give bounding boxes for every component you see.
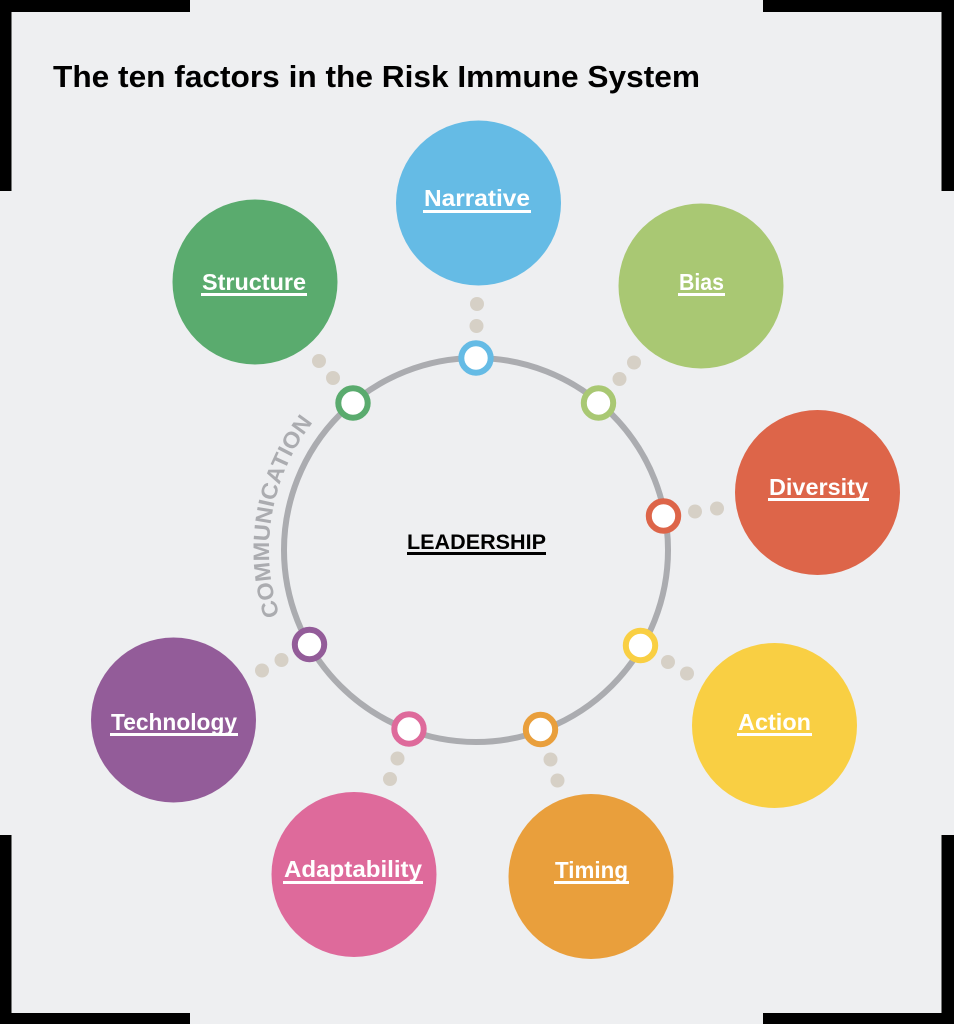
action connector dots <box>661 655 694 680</box>
factor: adaptability <box>272 714 436 957</box>
bias node <box>584 388 613 418</box>
timing connector dots <box>544 752 564 788</box>
timing label: Timing <box>555 857 628 883</box>
action label: Action <box>738 709 811 735</box>
factor: narrative <box>396 120 561 373</box>
narrative node <box>461 343 491 373</box>
bias connector dots <box>612 356 641 386</box>
narrative connector dots <box>470 297 484 333</box>
structure node <box>338 388 368 418</box>
adaptability connector dots <box>383 752 404 786</box>
structure label: Structure <box>202 269 306 295</box>
diversity node <box>649 501 678 531</box>
factor: diversity <box>649 410 900 575</box>
diversity label: Diversity <box>769 474 868 500</box>
curved label: communication: COMMUNICATION <box>254 414 312 617</box>
bias label: Bias <box>679 269 724 295</box>
narrative label: Narrative <box>424 185 530 211</box>
action node <box>626 631 655 660</box>
central ring <box>284 358 668 742</box>
narrative bubble <box>396 120 561 286</box>
adaptability label: Adaptability <box>284 856 422 882</box>
center label: leadership: LEADERSHIP <box>407 531 546 554</box>
action bubble <box>692 643 857 808</box>
adaptability bubble <box>272 792 436 957</box>
timing bubble <box>508 794 674 959</box>
diversity connector dots <box>688 502 724 518</box>
bias bubble <box>618 204 784 368</box>
technology bubble <box>91 638 256 802</box>
technology connector dots <box>255 653 288 678</box>
title: The ten factors in the Risk Immune System <box>53 59 700 94</box>
diversity bubble <box>735 410 900 575</box>
timing node <box>526 715 555 744</box>
adaptability node <box>394 714 424 744</box>
technology node <box>295 630 324 659</box>
structure bubble <box>172 200 338 364</box>
factor: bias <box>584 204 784 418</box>
factor: structure <box>172 200 368 418</box>
factor: timing <box>508 715 674 959</box>
factor: action <box>626 631 857 808</box>
factor: technology <box>91 630 324 802</box>
structure connector dots <box>312 354 340 385</box>
technology label: Technology <box>111 709 237 735</box>
